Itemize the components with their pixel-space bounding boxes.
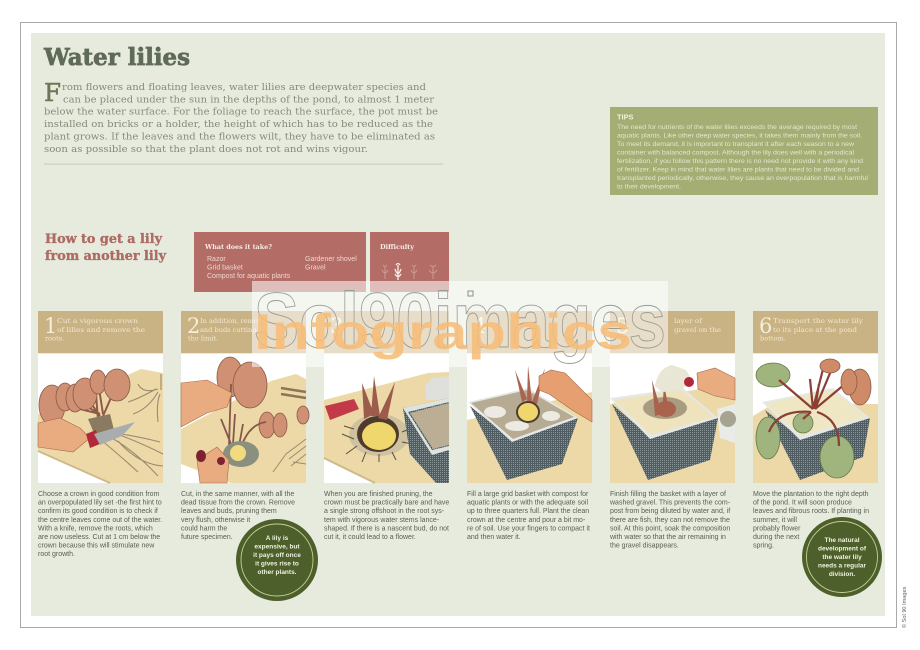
callout: natural development: division. bbox=[829, 571, 855, 578]
step 1 text bbox=[38, 491, 162, 558]
step 6 text: probably flower bbox=[753, 525, 801, 532]
step 5 text: there are fish, they can not remove the bbox=[610, 517, 730, 524]
step 5 header: gravel on the bbox=[674, 326, 721, 334]
step 1 text: crown because this will stimulate new bbox=[38, 543, 155, 550]
panel: tips: to their development. bbox=[617, 184, 681, 191]
step 1 illustration bbox=[38, 354, 163, 483]
step 2 text: future specimen. bbox=[181, 534, 233, 541]
step 3 text: a single strong offshoot in the root sys- bbox=[324, 508, 445, 515]
step 6 illustration bbox=[753, 354, 878, 483]
step 1 text: an overpopulated lily set -the first hint to bbox=[38, 500, 162, 507]
step 5 bbox=[609, 311, 736, 550]
section heading: How to get a lily bbox=[45, 232, 162, 247]
intro text block bbox=[44, 79, 438, 155]
step 4 text: Fill a large grid basket with compost for bbox=[467, 491, 589, 498]
callout: natural development bbox=[802, 517, 882, 597]
panel: tips: fertilization, if you follow this pattern there is no need not provide it with any kind bbox=[617, 158, 863, 165]
step 2 text: dead tissue from the crown. Remove bbox=[181, 500, 295, 507]
intro text block: installed on bricks or a holder, the height of which has to be reduced as the bbox=[44, 119, 433, 130]
step 2 header bbox=[181, 311, 306, 353]
panel: tips: aquatic plants. Like other deep water species, it takes them mainly from the soil. bbox=[617, 132, 862, 140]
panel: what does it take bbox=[194, 232, 366, 292]
intro text block: plant grows. If the leaves and the flowers wilt, they have to be eliminated as bbox=[44, 132, 435, 143]
step 1 bbox=[38, 311, 163, 558]
step 6 header bbox=[753, 311, 878, 353]
intro text block: below the water surface. For the foliage to reach the surface, the pot must be bbox=[44, 107, 438, 118]
step 6 header: bottom. bbox=[760, 334, 786, 342]
step 4 text: crown at the centre and pour a bit mo- bbox=[467, 517, 586, 524]
step 2 header: 2 bbox=[187, 314, 200, 338]
panel: difficulty: Difficulty bbox=[380, 243, 414, 251]
step 3 header: 3 bbox=[330, 314, 343, 338]
step 6 bbox=[753, 311, 878, 550]
step 2 text: leaves and buds, pruning them bbox=[181, 508, 277, 515]
title: Water lilies bbox=[43, 43, 190, 71]
panel: tips: TIPS bbox=[617, 112, 633, 122]
step 3 text: tem with vigorous water stems lance- bbox=[324, 517, 440, 524]
step 3 bbox=[324, 311, 449, 541]
step 5 text bbox=[609, 491, 731, 550]
step 1 header: roots. bbox=[45, 334, 64, 342]
step 3 header bbox=[324, 311, 449, 353]
step 2 header: and buds cutting at bbox=[200, 326, 266, 334]
section heading bbox=[45, 232, 166, 264]
callout: natural development: the water lily bbox=[822, 554, 862, 561]
callout: lily is expensive: other plants. bbox=[257, 569, 297, 576]
step 6 text: leaves and fibrous roots. If planting in bbox=[753, 508, 869, 515]
step 5 text: soil. At this point, soak the composition bbox=[610, 525, 730, 532]
section heading: from another lily bbox=[45, 249, 166, 264]
step 4 header: 4 bbox=[473, 314, 486, 338]
step 2 illustration bbox=[181, 354, 309, 483]
callout: lily is expensive: it gives rise to bbox=[255, 560, 299, 567]
step 6 header: to its place at the pond bbox=[773, 326, 858, 334]
step 1 header: Cut a vigorous crown bbox=[57, 317, 139, 325]
step 6 header: Transport the water lily bbox=[773, 317, 863, 325]
step 6 text: of the pond. It will soon produce bbox=[753, 500, 852, 507]
callout: lily is expensive: it pays off once bbox=[253, 552, 301, 559]
step 6 text: summer, it will bbox=[753, 517, 797, 524]
step 1 header: 1 bbox=[44, 314, 57, 338]
step 2 text: could harm the bbox=[181, 525, 227, 532]
step 3 text: crown must be practically bare and have bbox=[324, 500, 449, 507]
step 1 header: of lilies and remove the bbox=[57, 326, 145, 334]
step 1 text: root growth. bbox=[38, 551, 75, 558]
drop cap: F bbox=[44, 79, 61, 107]
step 6 text: spring. bbox=[753, 543, 774, 550]
step 5 illustration bbox=[610, 354, 736, 483]
step 6 text: during the next bbox=[753, 534, 799, 541]
panel: what does it take: Gravel bbox=[305, 265, 326, 272]
step 4 text: aquatic plants or with the adequate soil bbox=[467, 500, 588, 507]
panel: what does it take: Grid basket bbox=[207, 265, 243, 272]
icon: difficulty plants bbox=[382, 264, 437, 280]
intro text block: can be placed under the sun in the depths of the pond, to almost 1 meter bbox=[63, 94, 435, 105]
callout: natural development: The natural bbox=[824, 537, 860, 544]
callout: natural development: development of bbox=[818, 546, 867, 553]
step 1 text: the centre leaves come out of the water. bbox=[38, 517, 162, 524]
step 5 header: layer of bbox=[674, 317, 703, 325]
step 2 bbox=[181, 311, 309, 541]
step 6 header: 6 bbox=[759, 314, 772, 338]
intro text block: soon as possible so that the plant does not rot and wins vigour. bbox=[44, 144, 368, 155]
panel: tips: To meet its demand, it is important to transplant it after each season to a new bbox=[617, 141, 854, 148]
panel: what does it take: What does it take? bbox=[204, 243, 272, 251]
step 1 text: Choose a crown in good condition from bbox=[38, 491, 160, 498]
callout: lily is expensive: expensive, but bbox=[254, 544, 300, 550]
step 3 text bbox=[324, 491, 449, 541]
callout: natural development: needs a regular bbox=[818, 562, 866, 570]
panel: what does it take: Razor bbox=[207, 256, 226, 263]
step 3 text: cut it, it could lead to a flower. bbox=[324, 534, 416, 541]
copyright credit: © Sol 90 Images bbox=[901, 586, 908, 628]
step 5 header: 5 bbox=[616, 314, 629, 338]
step 5 text: post from being diluted by water and, if bbox=[610, 508, 730, 515]
step 3 illustration bbox=[324, 354, 449, 483]
step 2 text bbox=[181, 491, 295, 541]
step 1 header bbox=[38, 311, 163, 353]
step 4 text: re of soil. Use your fingers to compact it bbox=[467, 525, 590, 532]
intro text block: rom flowers and floating leaves, water lilies are deepwater species and bbox=[62, 82, 426, 93]
panel: tips: transplanted periodically, otherwise, they cause an overpopulation that is harmful bbox=[617, 175, 869, 182]
panel: difficulty bbox=[370, 232, 449, 292]
callout: lily is expensive bbox=[236, 519, 318, 601]
step 1 text: are now useless. Cut at 1 cm below the bbox=[38, 534, 160, 541]
step 2 text: very flush, otherwise it bbox=[181, 517, 250, 524]
step 5 text: the gravel disappears. bbox=[610, 543, 679, 550]
step 1 text: confirm its good condition is to check if bbox=[38, 508, 158, 515]
step 6 text: Move the plantation to the right depth bbox=[753, 491, 869, 498]
panel: tips: The need for nutrients of the water lilies exceeds the average required by most bbox=[617, 124, 857, 131]
step 2 header: the limit. bbox=[188, 334, 218, 342]
watermark: Infographics bbox=[254, 304, 632, 360]
step 5 text: washed gravel. This prevents the com- bbox=[609, 500, 731, 507]
step 4 text: and then water it. bbox=[467, 534, 521, 541]
watermark: Sol90images bbox=[254, 276, 666, 364]
step 2 text: Cut, in the same manner, with all the bbox=[181, 491, 294, 498]
step 4 bbox=[467, 311, 592, 541]
panel: tips: of fertilizer. Keep in mind that water lilies are plants that need to be divided and bbox=[617, 167, 859, 174]
panel: what does it take: Gardener shovel bbox=[305, 256, 357, 263]
panel: tips: container with balanced compost. Although the lily does well with a periodical bbox=[617, 150, 855, 156]
panel: what does it take: Compost for aquatic plants bbox=[207, 273, 291, 280]
step 4 header bbox=[467, 311, 592, 353]
step 2 header: In addition, remove bbox=[200, 317, 266, 325]
step 4 illustration bbox=[467, 354, 592, 483]
step 5 text: Finish filling the basket with a layer of bbox=[610, 491, 726, 498]
callout: lily is expensive: A lily is bbox=[266, 535, 289, 542]
step 5 text: with water so that the air remaining in bbox=[609, 534, 726, 541]
step 4 text: up to three quarters full. Plant the clean bbox=[467, 508, 589, 515]
step 6 text bbox=[753, 491, 869, 550]
step 1 text: With a knife, remove the roots, which bbox=[38, 525, 153, 532]
panel: tips bbox=[610, 107, 878, 195]
step 3 text: When you are finished pruning, the bbox=[324, 491, 433, 498]
step 5 header bbox=[610, 311, 735, 353]
step 4 text bbox=[467, 491, 590, 541]
step 3 text: shaped. If there is a nascent bud, do not bbox=[324, 525, 449, 532]
